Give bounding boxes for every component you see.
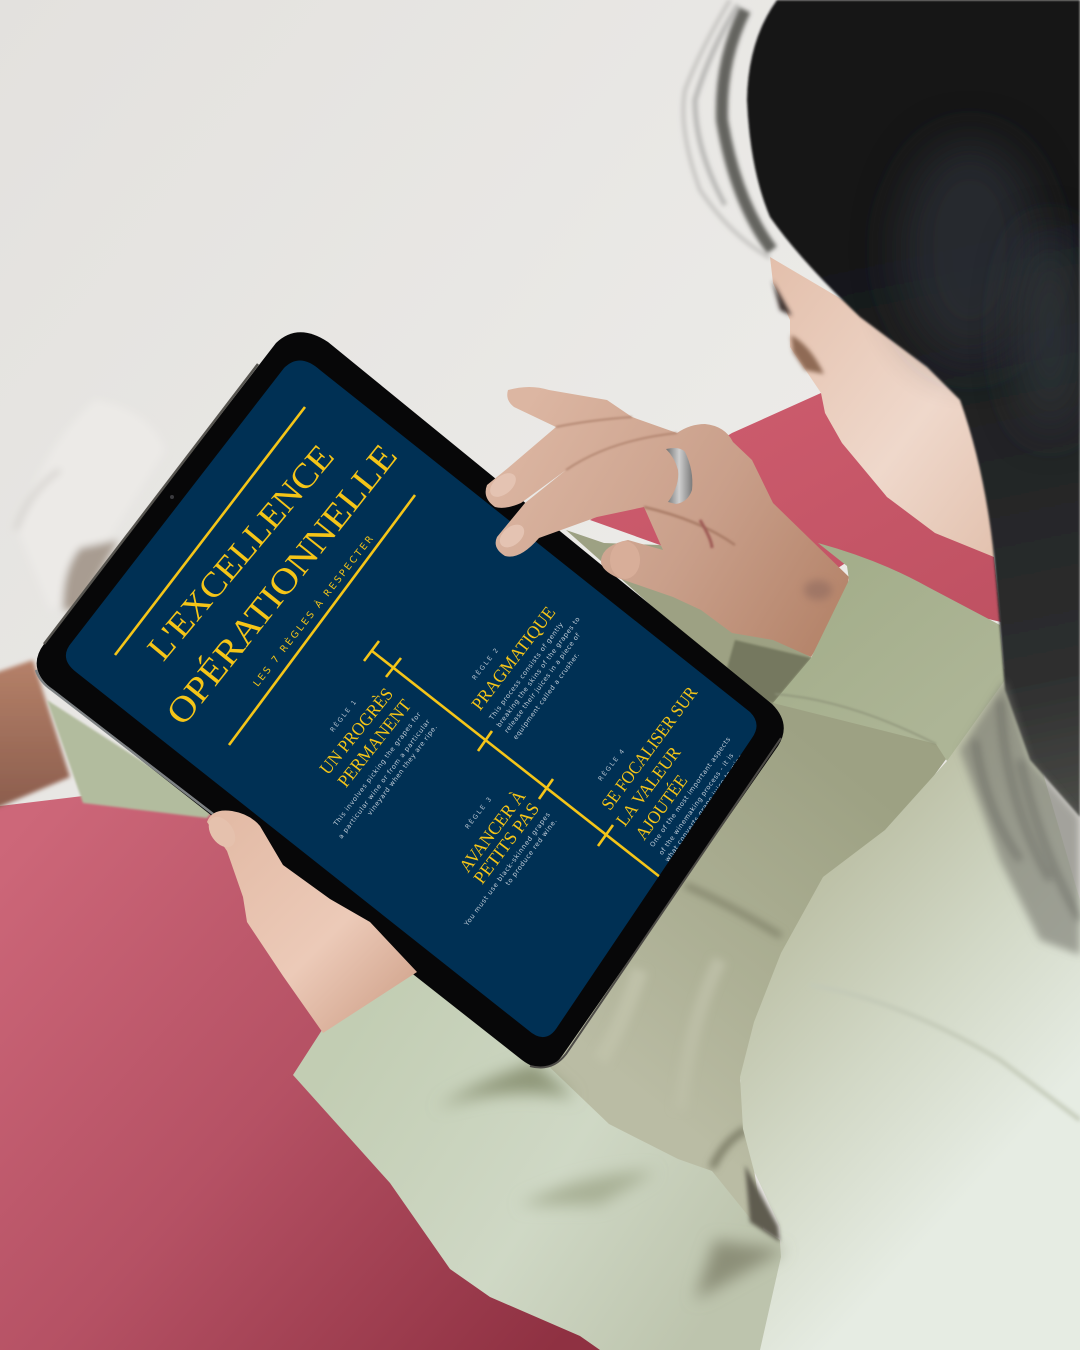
upper sleeve	[773, 543, 1005, 761]
wrist shadow	[804, 580, 832, 600]
rule 4: LA VALEUR	[612, 743, 685, 830]
camera	[170, 495, 174, 499]
hair sheen	[900, 140, 1040, 360]
sleeve fold shadows	[437, 1062, 785, 1300]
rule 1: vineyard when they are ripe.	[366, 723, 439, 817]
fingernails	[486, 468, 640, 579]
rule 1: UN PROGRÈS	[315, 683, 397, 778]
rule 4: One of the most important aspects	[648, 735, 732, 849]
finger separations	[556, 417, 735, 548]
title: L'EXCELLENCE	[140, 437, 342, 668]
rule 2: PRAGMATIQUE	[467, 603, 559, 714]
ring	[666, 448, 692, 504]
tablet body	[37, 332, 784, 1068]
rule 4: RÈGLE 4	[596, 747, 626, 783]
rule 3: You must use black-skinned grapes	[462, 810, 552, 928]
lower left sleeve	[293, 960, 781, 1350]
pink sofa, lower left	[0, 796, 600, 1350]
subtitle: LES 7 RÈGLES À RESPECTER	[251, 533, 376, 689]
rule 2: RÈGLE 2	[470, 646, 500, 682]
trouser creases	[600, 885, 781, 1168]
rule 2: equipment called a crusher.	[512, 651, 581, 741]
rule 2: release their juices in a piece of	[503, 631, 582, 735]
rule 4	[596, 683, 745, 863]
rule 1: This involves picking the grapes for	[331, 711, 423, 828]
rule 1: RÈGLE 1	[328, 698, 358, 734]
rule 3: to produce red wine.	[504, 817, 559, 887]
brow and eye	[772, 280, 824, 374]
thumbnail	[203, 812, 241, 852]
crevice between sleeve and jacket	[745, 1165, 780, 1242]
rule 3: RÈGLE 3	[463, 795, 493, 831]
rule 2: This process consists of gently	[487, 621, 565, 722]
rule 1: PERMANENT	[333, 695, 415, 791]
screen content	[115, 407, 745, 928]
jacket fold	[810, 985, 1080, 1120]
title: OPÉRATIONNELLE	[158, 437, 405, 732]
timeline	[364, 641, 660, 877]
green trouser cuff, left	[47, 700, 215, 818]
rule 1: a particular wine or from a particular	[337, 718, 432, 840]
rule 2: breaking the skins of the grapes to	[495, 616, 582, 729]
pink sofa, upper right	[590, 393, 1001, 622]
rule 1	[315, 683, 439, 840]
trousers	[530, 530, 960, 1240]
hair fringe	[683, 0, 772, 258]
sleeve seam	[775, 694, 936, 744]
blurred sneaker	[16, 400, 165, 610]
tablet screen	[66, 360, 757, 1037]
tablet	[36, 332, 784, 1068]
rule 4: what converts grape juice to wine	[663, 753, 745, 863]
hair	[683, 0, 1080, 955]
rule 4: AJOUTÉE	[630, 770, 691, 843]
rule 4: SE FOCALISER SUR	[597, 683, 701, 814]
rule 3: AVANCER À	[454, 786, 529, 876]
rule 3: PETITS PAS	[469, 799, 543, 888]
jacket body	[740, 660, 1080, 1350]
title rule bottom	[229, 495, 415, 745]
hair mass	[747, 0, 1080, 817]
rule 4: of the winemaking process - it is	[657, 751, 736, 857]
hair wisps over shoulder	[960, 680, 1080, 955]
lower hand holding tablet	[203, 810, 417, 1033]
dark fold under cuff	[727, 640, 811, 703]
upper hand	[486, 387, 849, 657]
hand silhouette	[486, 387, 849, 657]
left knee skin	[0, 660, 70, 815]
rule 2	[467, 603, 582, 741]
face	[770, 257, 998, 557]
title rule top	[115, 407, 305, 655]
tablet rim	[36, 364, 781, 1068]
